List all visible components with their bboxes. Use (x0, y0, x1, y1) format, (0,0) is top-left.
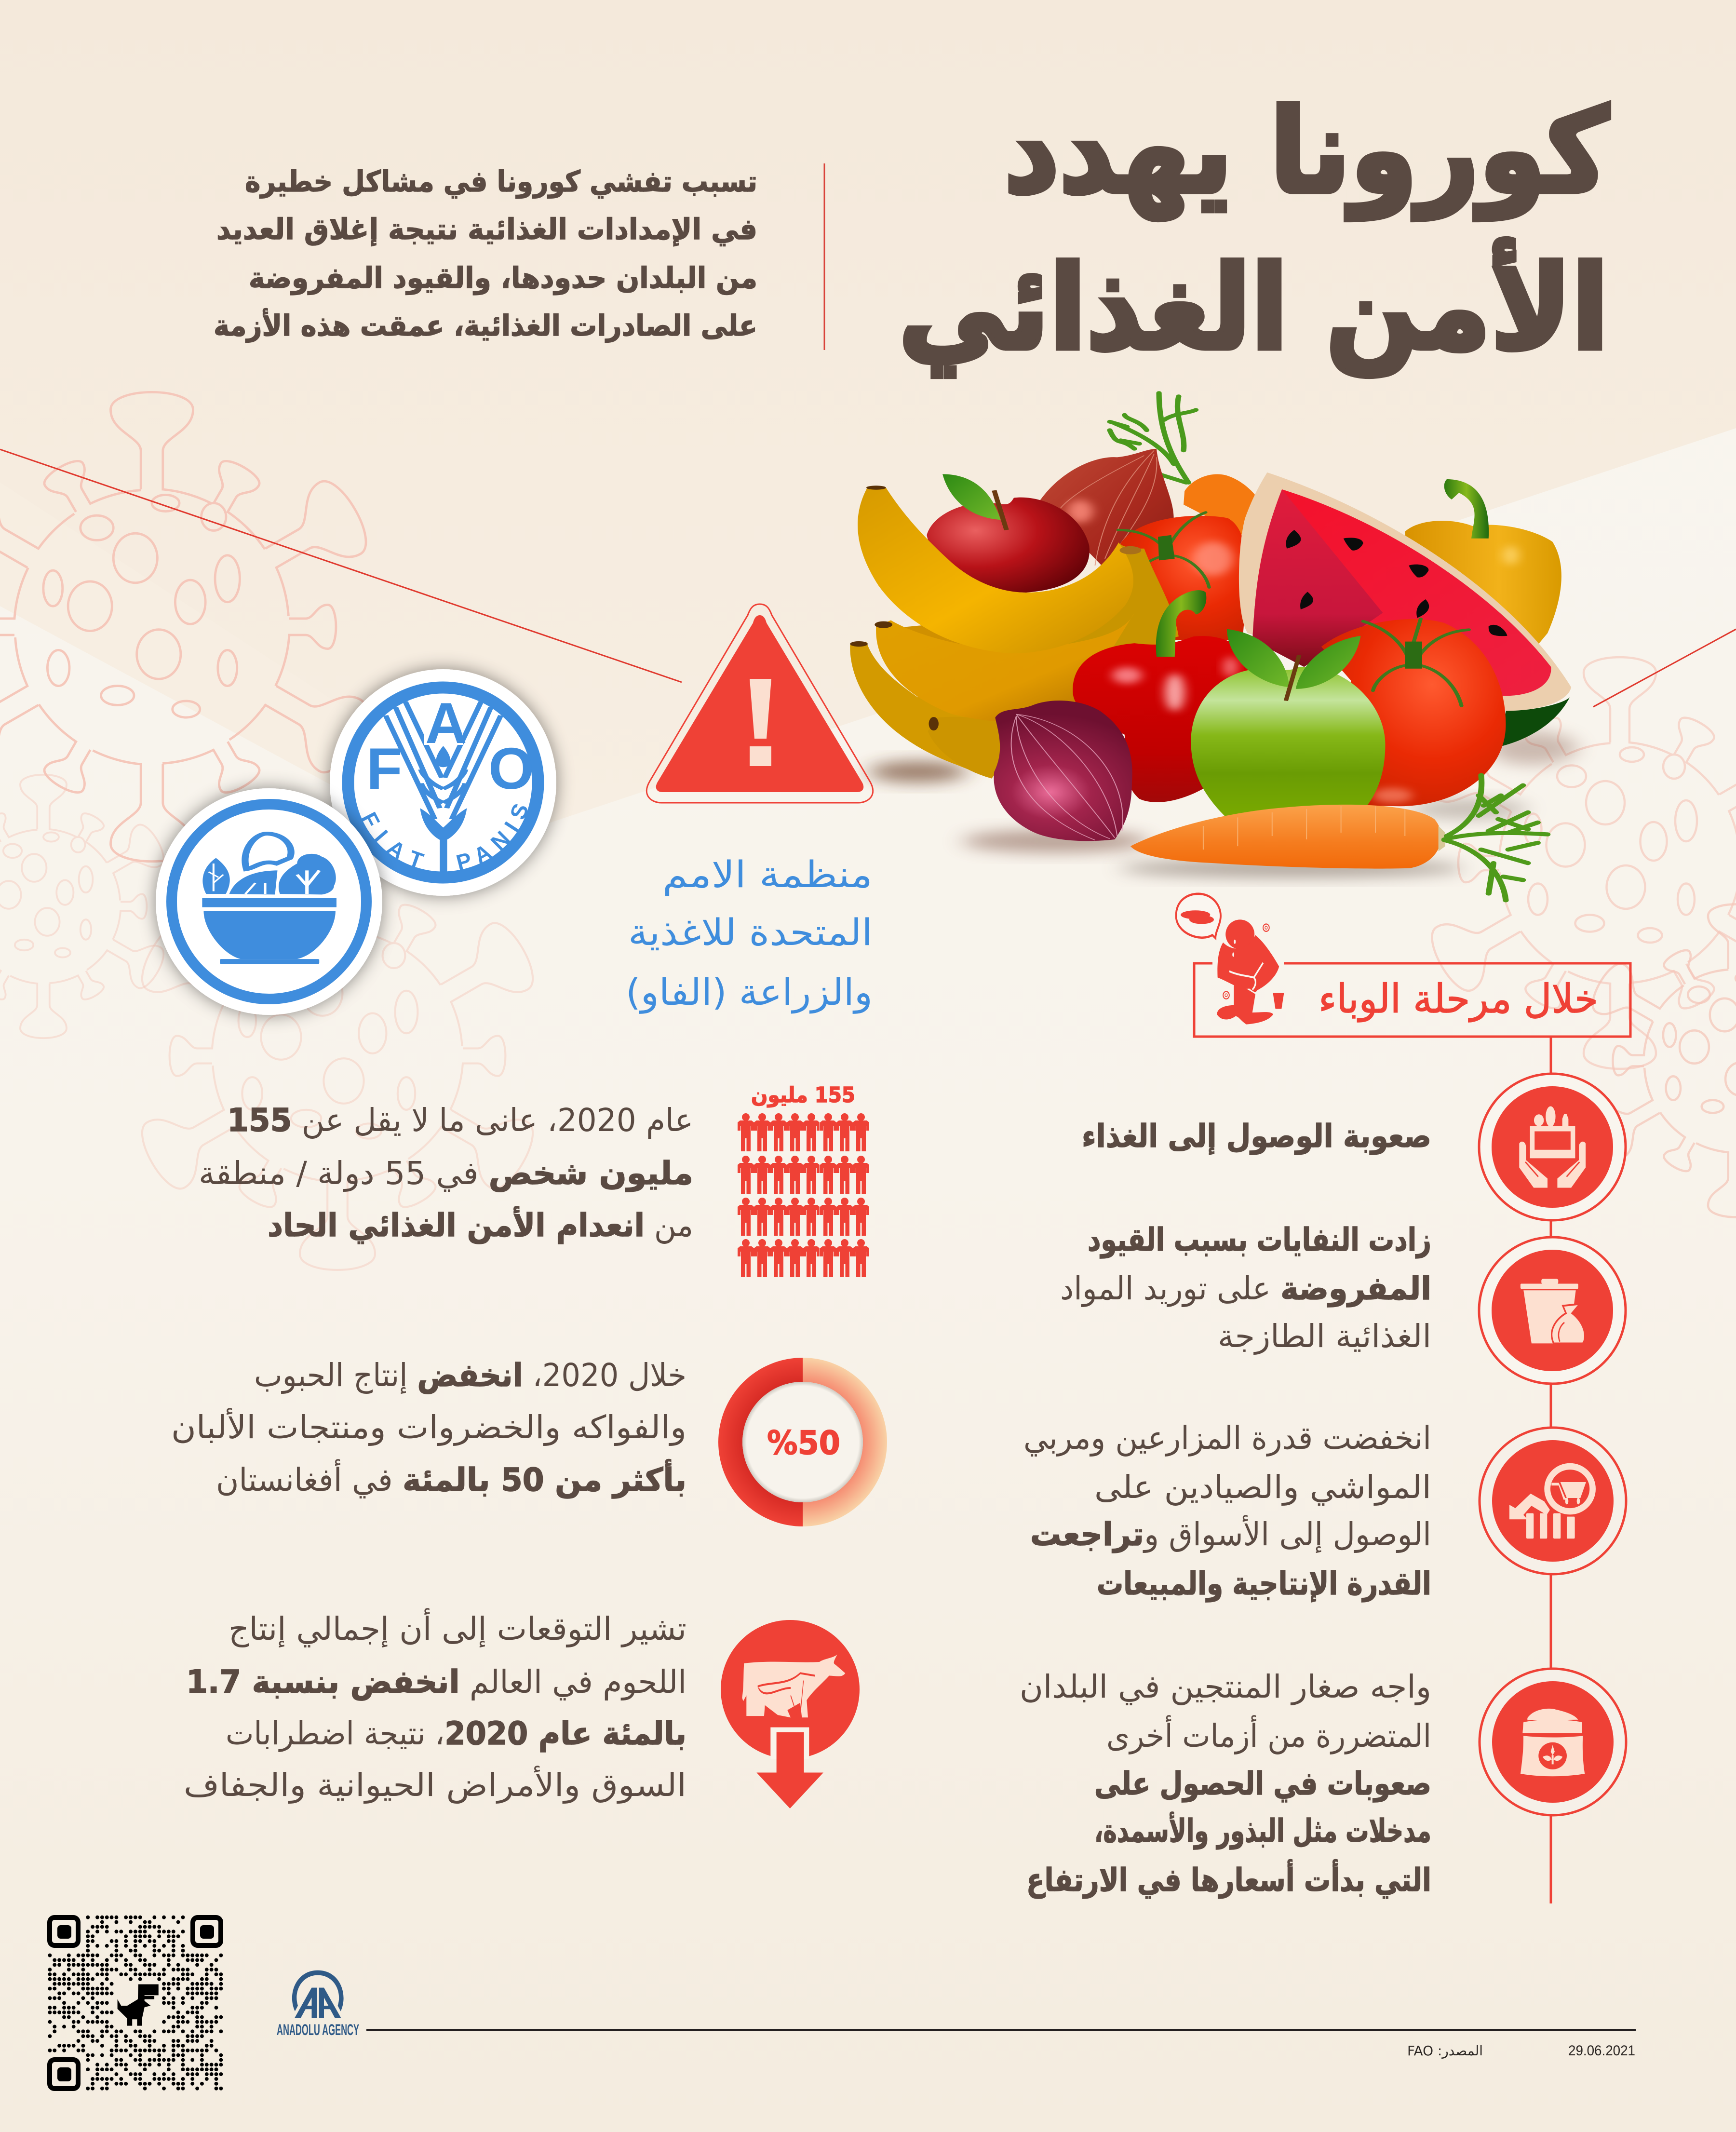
pictogram: grid of people (738, 1113, 869, 1277)
QR code (50, 1917, 221, 2089)
text: production fell 50 percent: خلال 2020، انخفض إنتاج الحبوب (254, 1357, 686, 1394)
text: farmers capacity: الوصول إلى الأسواق وتراجعت (1030, 1514, 1431, 1553)
donut chart 50 percent (718, 1358, 887, 1526)
FAO logo badge: A (425, 691, 467, 756)
illustration: pile of fruits and vegetables (850, 393, 1577, 900)
text: food waste (1060, 1221, 1431, 1355)
timeline node 3: falling sales icon (1480, 1428, 1626, 1574)
title (899, 84, 1609, 377)
text: small producers: صعوبات في الحصول على (1094, 1765, 1431, 1803)
text: farmers capacity: انخفضت قدرة المزارعين ومربي (1023, 1419, 1431, 1457)
footer rule (366, 2029, 1636, 2031)
text: meat production forecast: بالمئة عام 2020، نتيجة اضطرابات (226, 1715, 686, 1753)
text: production fell 50 percent: بأكثر من 50 بالمئة في أفغانستان (216, 1459, 686, 1498)
logo: Anadolu Agency: ANADOLU AGENCY (277, 2021, 359, 2038)
text: 155 million people: مليون شخص في 55 دولة / منطقة (199, 1155, 693, 1192)
FAO logo badge: FIAT (362, 812, 425, 867)
icon: livestock with down arrow (721, 1620, 860, 1808)
panel: during the pandemic heading: خلال مرحلة الوباء (1319, 976, 1598, 1022)
text: small producers: التي بدأت أسعارها في الارتفاع (1026, 1859, 1431, 1899)
text: food waste: المفروضة على توريد المواد (1060, 1270, 1431, 1308)
text: small producers: واجه صغار المنتجين في البلدان (1020, 1668, 1431, 1705)
text: meat production forecast: تشير التوقعات إلى أن إجمالي إنتاج (229, 1608, 686, 1648)
panel: during the pandemic heading (1194, 963, 1630, 1037)
donut chart 50 percent: %50 (767, 1424, 840, 1462)
FAO description: منظمة الامم (662, 853, 873, 896)
food bowl badge (156, 788, 382, 1015)
intro paragraph: في الإمدادات الغذائية نتيجة إغلاق العديد (216, 213, 757, 246)
FAO logo badge (318, 658, 568, 907)
text: production fell 50 percent: والفواكه والخضروات ومنتجات الألبان (171, 1407, 686, 1446)
intro paragraph: على الصادرات الغذائية، عمقت هذه الأزمة (214, 308, 757, 343)
icon: warning triangle (646, 604, 873, 803)
timeline node 2: food waste icon (1479, 1237, 1626, 1384)
text: meat production forecast: السوق والأمراض الحيوانية والجفاف (184, 1765, 686, 1804)
timeline vertical line (1549, 1037, 1552, 1903)
text: food waste: الغذائية الطازجة (1218, 1318, 1431, 1355)
date: 29.06.2021 (1568, 2043, 1635, 2059)
logo: Anadolu Agency (277, 1970, 359, 2038)
FAO description (626, 853, 873, 1014)
text: 155 million people: عام 2020، عانى ما لا يقل عن 155 (227, 1102, 693, 1139)
text: meat production forecast (184, 1608, 686, 1804)
FAO logo badge: O (488, 736, 534, 801)
text: farmers capacity (1023, 1419, 1431, 1603)
text: meat production forecast: اللحوم في العالم انخفض بنسبة 1.7 (186, 1663, 686, 1700)
stat: 155 million label: 155 مليون (751, 1083, 855, 1107)
text: small producers (1020, 1668, 1431, 1899)
text: farmers capacity: المواشي والصيادين على (1094, 1469, 1431, 1506)
text: 155 million people (199, 1102, 693, 1244)
intro paragraph (214, 165, 757, 343)
timeline node 1: food access icon (1479, 1074, 1626, 1220)
source credit: المصدر: FAO (1407, 2043, 1483, 2059)
FAO description: المتحدة للاغذية (628, 911, 873, 954)
text: food waste: زادت النفايات بسبب القيود (1088, 1221, 1431, 1259)
text: access to food: صعوبة الوصول إلى الغذاء (1082, 1118, 1431, 1155)
text: small producers: مدخلات مثل البذور والأسمدة، (1094, 1811, 1431, 1850)
decorative diagonal line right (1593, 629, 1736, 707)
FAO logo badge: PANIS (456, 804, 527, 870)
title divider (823, 163, 825, 350)
title: الأمن الغذائي (899, 239, 1609, 377)
coronavirus outlines background pattern (0, 392, 1736, 1270)
icon: hungry man (1176, 894, 1284, 1025)
timeline node 4: seed sack icon (1480, 1669, 1626, 1815)
text: farmers capacity: القدرة الإنتاجية والمبيعات (1097, 1565, 1431, 1603)
intro paragraph: من البلدان حدودها، والقيود المفروضة (249, 261, 757, 295)
FAO logo badge: F (366, 736, 403, 801)
title: كورونا يهدد (1004, 84, 1609, 220)
FAO description: والزراعة (الفاو) (626, 971, 873, 1014)
intro paragraph: تسبب تفشي كورونا في مشاكل خطيرة (245, 165, 757, 199)
decorative diagonal line left (0, 449, 682, 682)
text: small producers: المتضررة من أزمات أخرى (1106, 1715, 1431, 1754)
text: production fell 50 percent (171, 1357, 686, 1498)
text: 155 million people: من انعدام الأمن الغذائي الحاد (268, 1206, 693, 1244)
